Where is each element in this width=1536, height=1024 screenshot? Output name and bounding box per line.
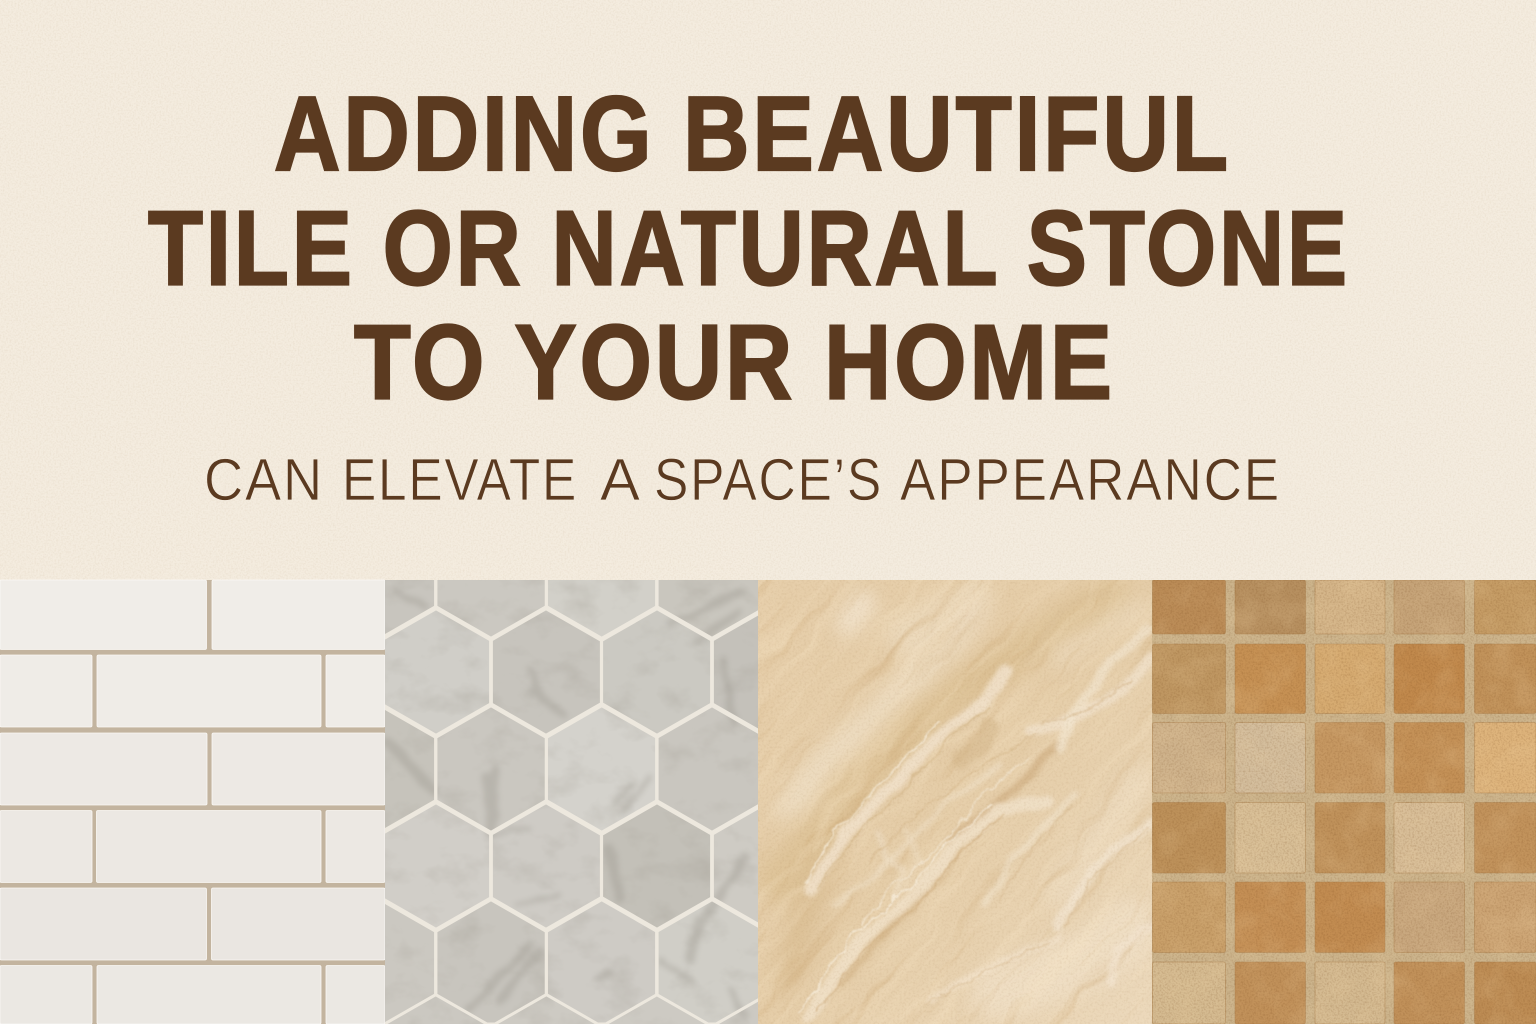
- panel: white subway brick tile: [0, 580, 385, 1024]
- mosaic row 4: [1152, 802, 1536, 873]
- mosaic row 6: [1152, 962, 1536, 1024]
- title line 2: TILE OR NATURAL STONE: [148, 190, 1350, 308]
- subtitle: A: [600, 447, 642, 513]
- row 3 bricks: [0, 733, 385, 805]
- panel: grey hexagon marble tile: [385, 580, 758, 1024]
- mosaic row 1: [1152, 580, 1536, 634]
- panel: terracotta square mosaic tile: [1152, 580, 1536, 1024]
- crisp vein strands: [800, 680, 1148, 1012]
- mosaic row 3: [1152, 722, 1536, 793]
- marble veins: [388, 590, 745, 1015]
- mosaic surface texture: [1152, 580, 1536, 1024]
- hexagon tonal mottling: [385, 580, 758, 1024]
- subtitle: ELEVATE: [342, 447, 578, 513]
- subtitle: SPACE’S: [654, 447, 883, 513]
- stone grain: [758, 580, 1152, 1024]
- mosaic row 5: [1152, 882, 1536, 952]
- row 4 bricks: [0, 810, 385, 882]
- hexagon tile faces: [548, 708, 710, 928]
- broad stone bands: [780, 600, 1140, 990]
- title line 1: ADDING BEAUTIFUL: [274, 75, 1231, 193]
- subtitle: APPEARANCE: [900, 447, 1281, 513]
- title line 3: TO YOUR HOME: [354, 304, 1115, 422]
- row 6 bricks: [0, 966, 385, 1024]
- stone strata texture: [758, 580, 1152, 1024]
- subtitle: CAN: [204, 447, 324, 513]
- row 2 bricks: [0, 655, 385, 727]
- mosaic row 2: [1152, 644, 1536, 714]
- title: [148, 75, 1350, 422]
- panel: beige travertine marble slab: [758, 580, 1152, 1024]
- dark and light flowing veins: [808, 590, 1150, 1017]
- mosaic squares: [1152, 580, 1536, 1024]
- row 1 bricks: [0, 580, 385, 650]
- row 5 bricks: [0, 888, 385, 960]
- paper background: [0, 0, 1536, 582]
- hexagon grout lines: [385, 580, 758, 1024]
- subtitle: [204, 447, 1281, 513]
